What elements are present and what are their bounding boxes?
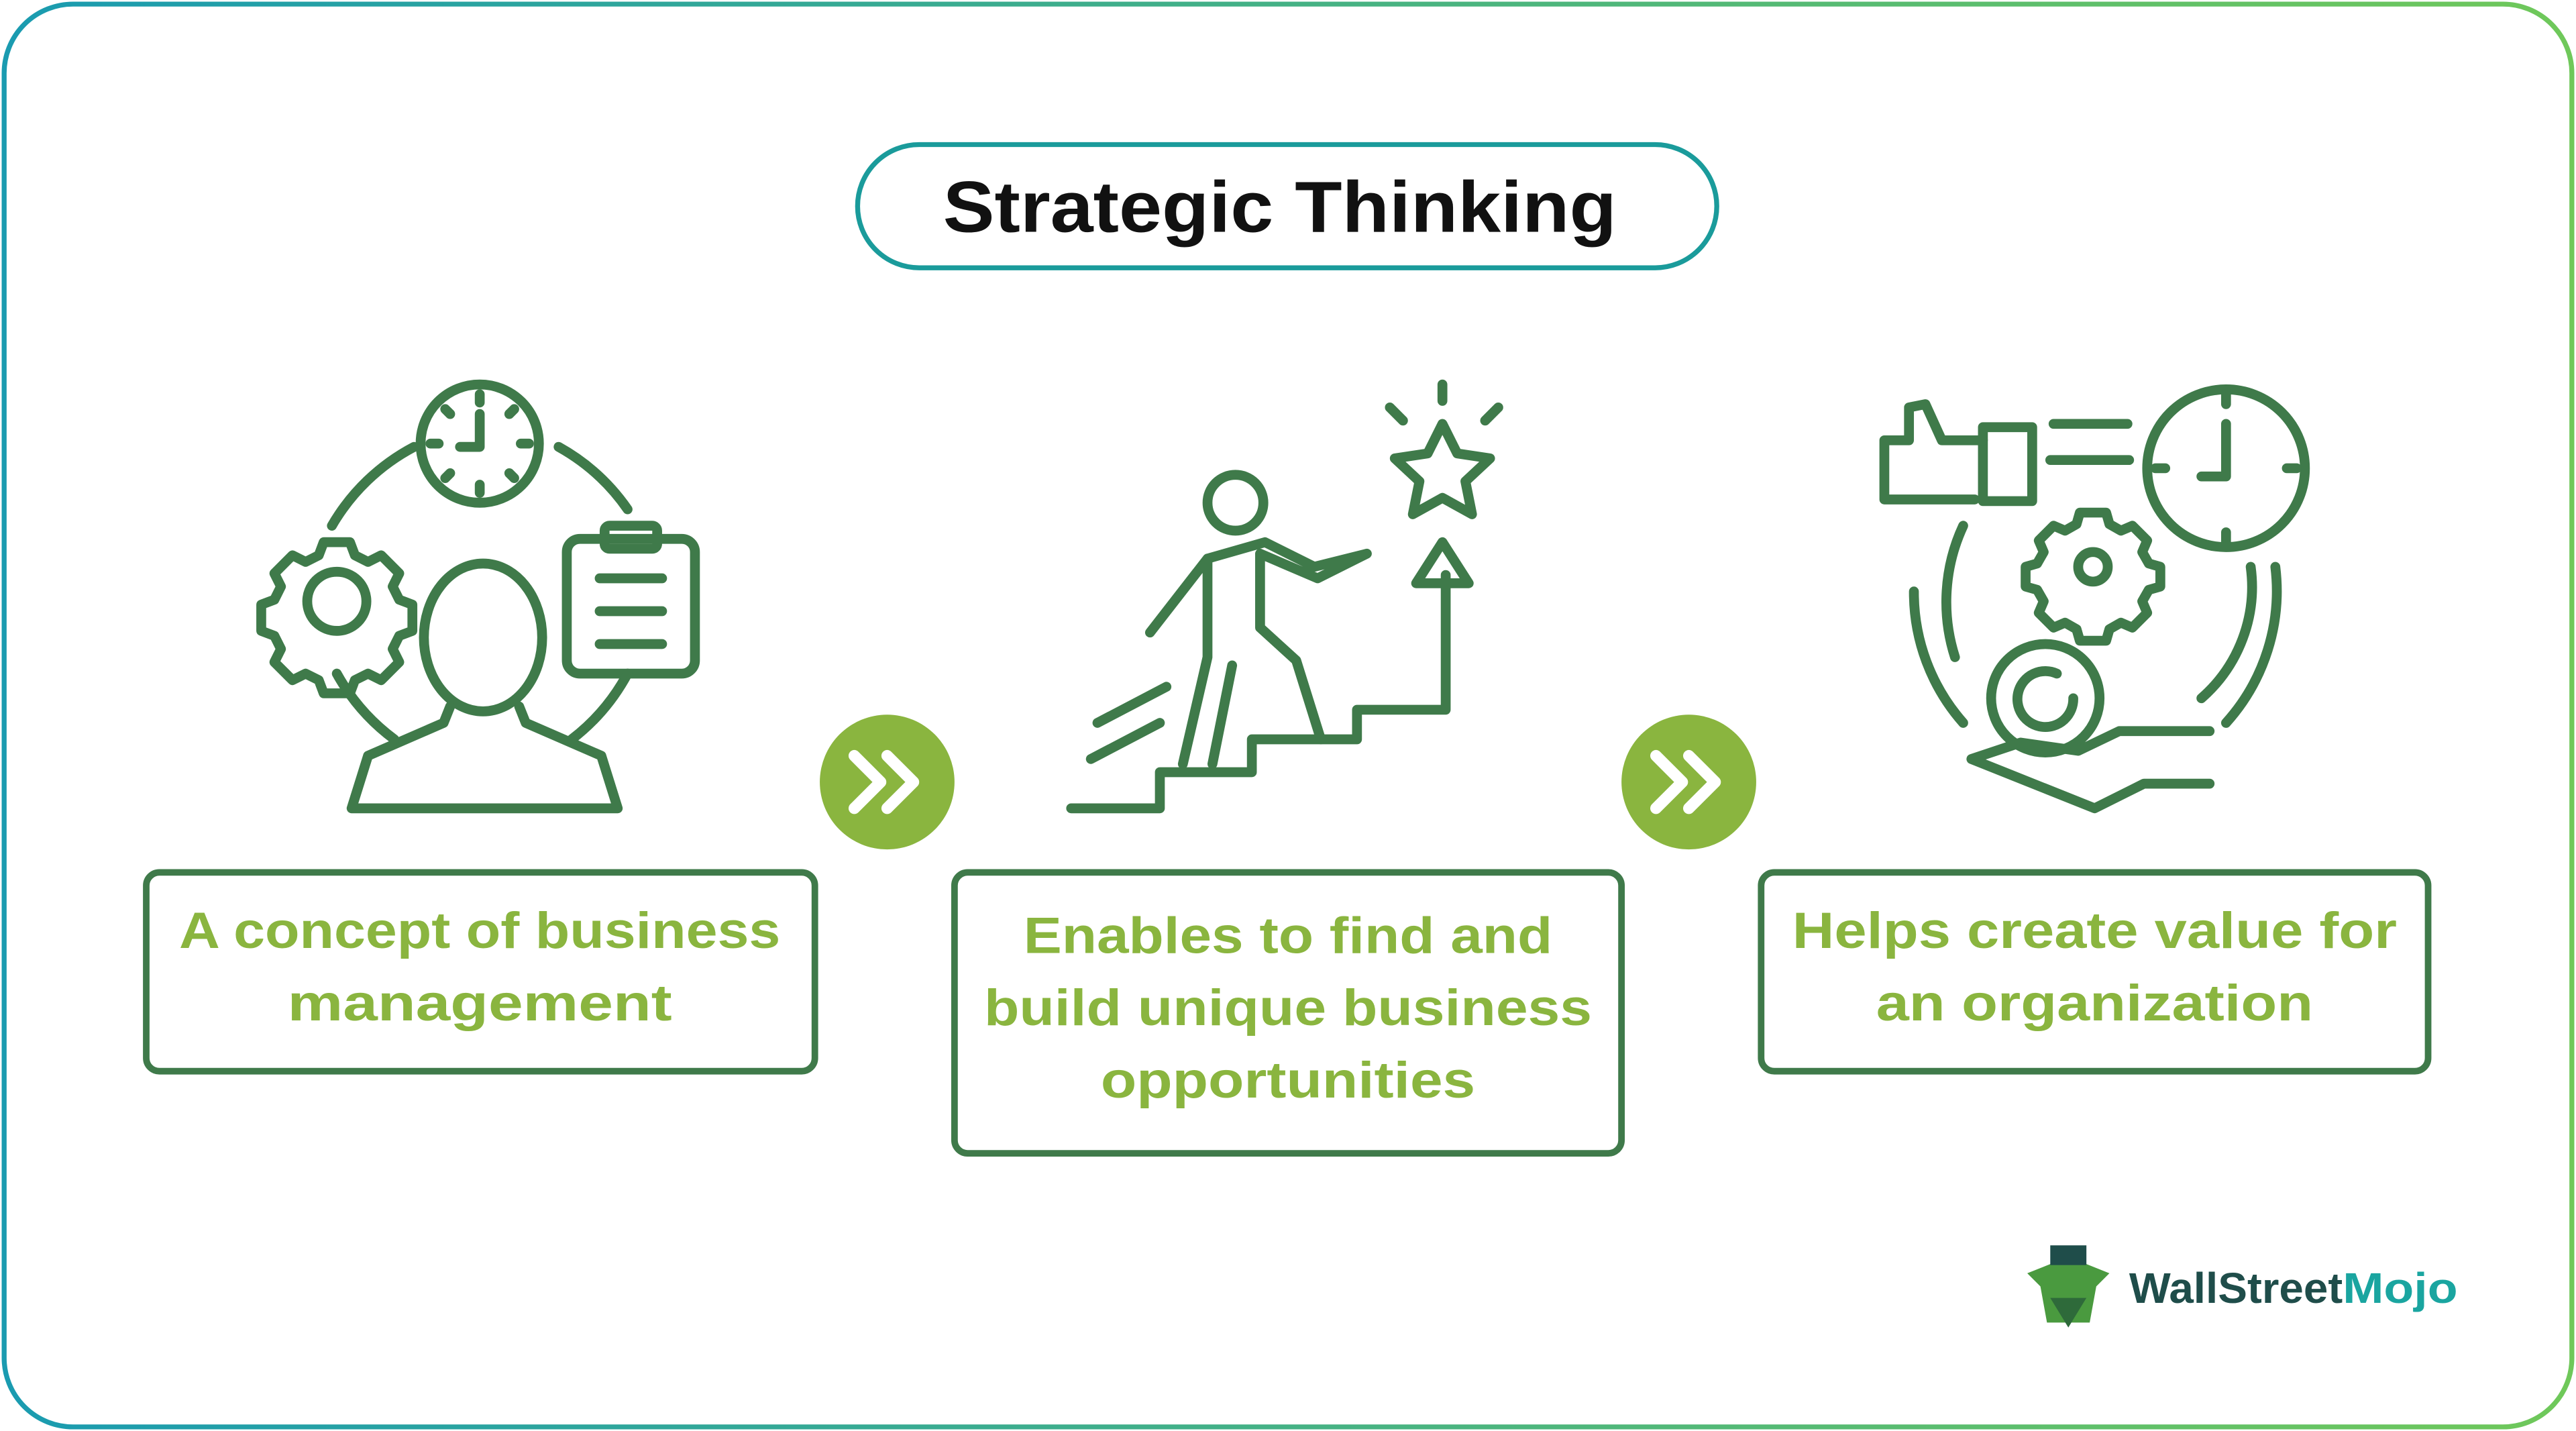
title pill [857, 145, 1717, 268]
box 1 [146, 872, 815, 1071]
logo: WallStreet [2129, 1265, 2343, 1312]
icon: person with clock gear clipboard [261, 384, 695, 808]
box 2: build unique business [984, 979, 1592, 1037]
arrow circle 2 [1621, 714, 1756, 849]
title: Strategic Thinking [943, 166, 1617, 247]
logo: Mojo [2343, 1265, 2458, 1312]
icon: thumbs up, clock, gear, coin in hand [1884, 389, 2305, 808]
box 3: an organization [1876, 975, 2313, 1032]
icon: climbing stairs to star [1071, 384, 1498, 808]
box 2: opportunities [1101, 1052, 1475, 1109]
box 3: Helps create value for [1792, 902, 2397, 959]
box 1: A concept of business [179, 902, 780, 959]
box 2: Enables to find and [1024, 907, 1552, 964]
box 2 [955, 872, 1621, 1153]
logo [2027, 1245, 2458, 1328]
box 1: management [288, 975, 672, 1032]
box 3 [1761, 872, 2428, 1071]
arrow circle 1 [820, 714, 955, 849]
